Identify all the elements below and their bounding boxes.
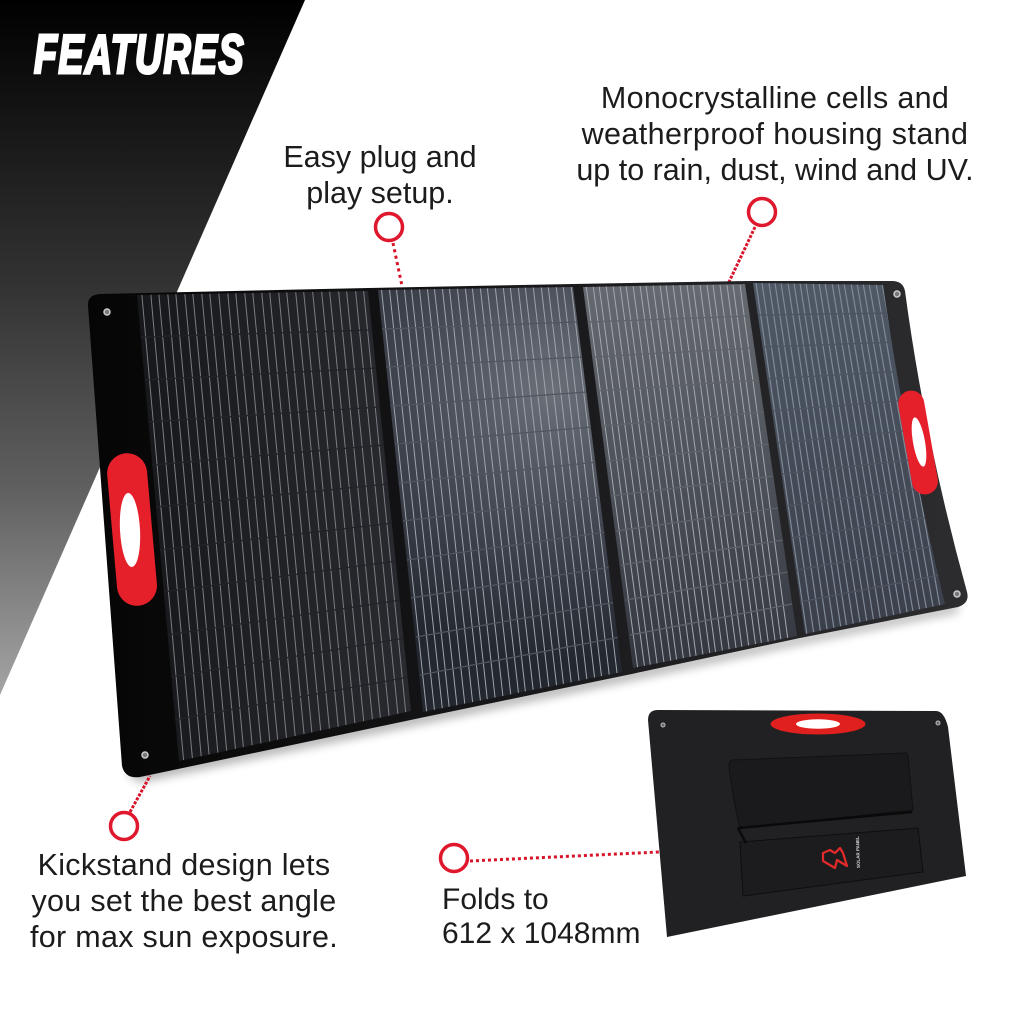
solar panel, unfolded: [88, 281, 968, 777]
solar cell block 2: [378, 285, 622, 715]
zipper: [738, 812, 912, 843]
brand label: SOLAR PANEL: [855, 836, 861, 868]
callout text: you set the best angle: [31, 884, 337, 918]
callout text: Monocrystalline cells and: [601, 81, 949, 115]
solar cell block 1: [137, 285, 411, 765]
callout text: weatherproof housing stand: [581, 117, 968, 151]
callout leader: [130, 776, 150, 812]
callout marker: [376, 214, 402, 240]
carry handle: [770, 714, 866, 734]
shadow under solar panel: [125, 604, 958, 782]
folded solar panel: [648, 710, 966, 937]
grommets: [661, 721, 940, 727]
callout text: 612 x 1048mm: [442, 917, 640, 950]
callout text: play setup.: [306, 176, 454, 210]
callout text: for max sun exposure.: [30, 920, 338, 954]
zip pouch: [729, 753, 913, 828]
callout leader: [470, 852, 659, 861]
callout marker: [440, 844, 468, 872]
callout: folds: [440, 844, 659, 950]
brand logo: [823, 848, 847, 868]
callout marker: [748, 198, 776, 226]
callout: kickstand: [30, 776, 338, 954]
solar cell block 3: [583, 284, 797, 670]
lower pouch: [740, 828, 923, 896]
background gradient wedge: [0, 0, 305, 695]
callout marker: [110, 812, 138, 840]
grommets: [104, 291, 960, 758]
callout leader: [729, 227, 755, 282]
callout: weatherproof: [576, 81, 974, 282]
callout text: Kickstand design lets: [38, 848, 330, 882]
left red handle: [105, 452, 159, 607]
right red handle: [896, 389, 940, 496]
callout leader: [393, 243, 402, 286]
solar cell block 4: [753, 283, 945, 635]
title: FEATURES: [34, 23, 245, 85]
panel frame: [88, 281, 968, 777]
callout text: Easy plug and: [283, 140, 477, 174]
folded panel body: [648, 710, 966, 937]
callout text: up to rain, dust, wind and UV.: [576, 153, 974, 187]
callout text: Folds to: [442, 883, 549, 916]
callout: easy plug and play: [283, 140, 477, 286]
